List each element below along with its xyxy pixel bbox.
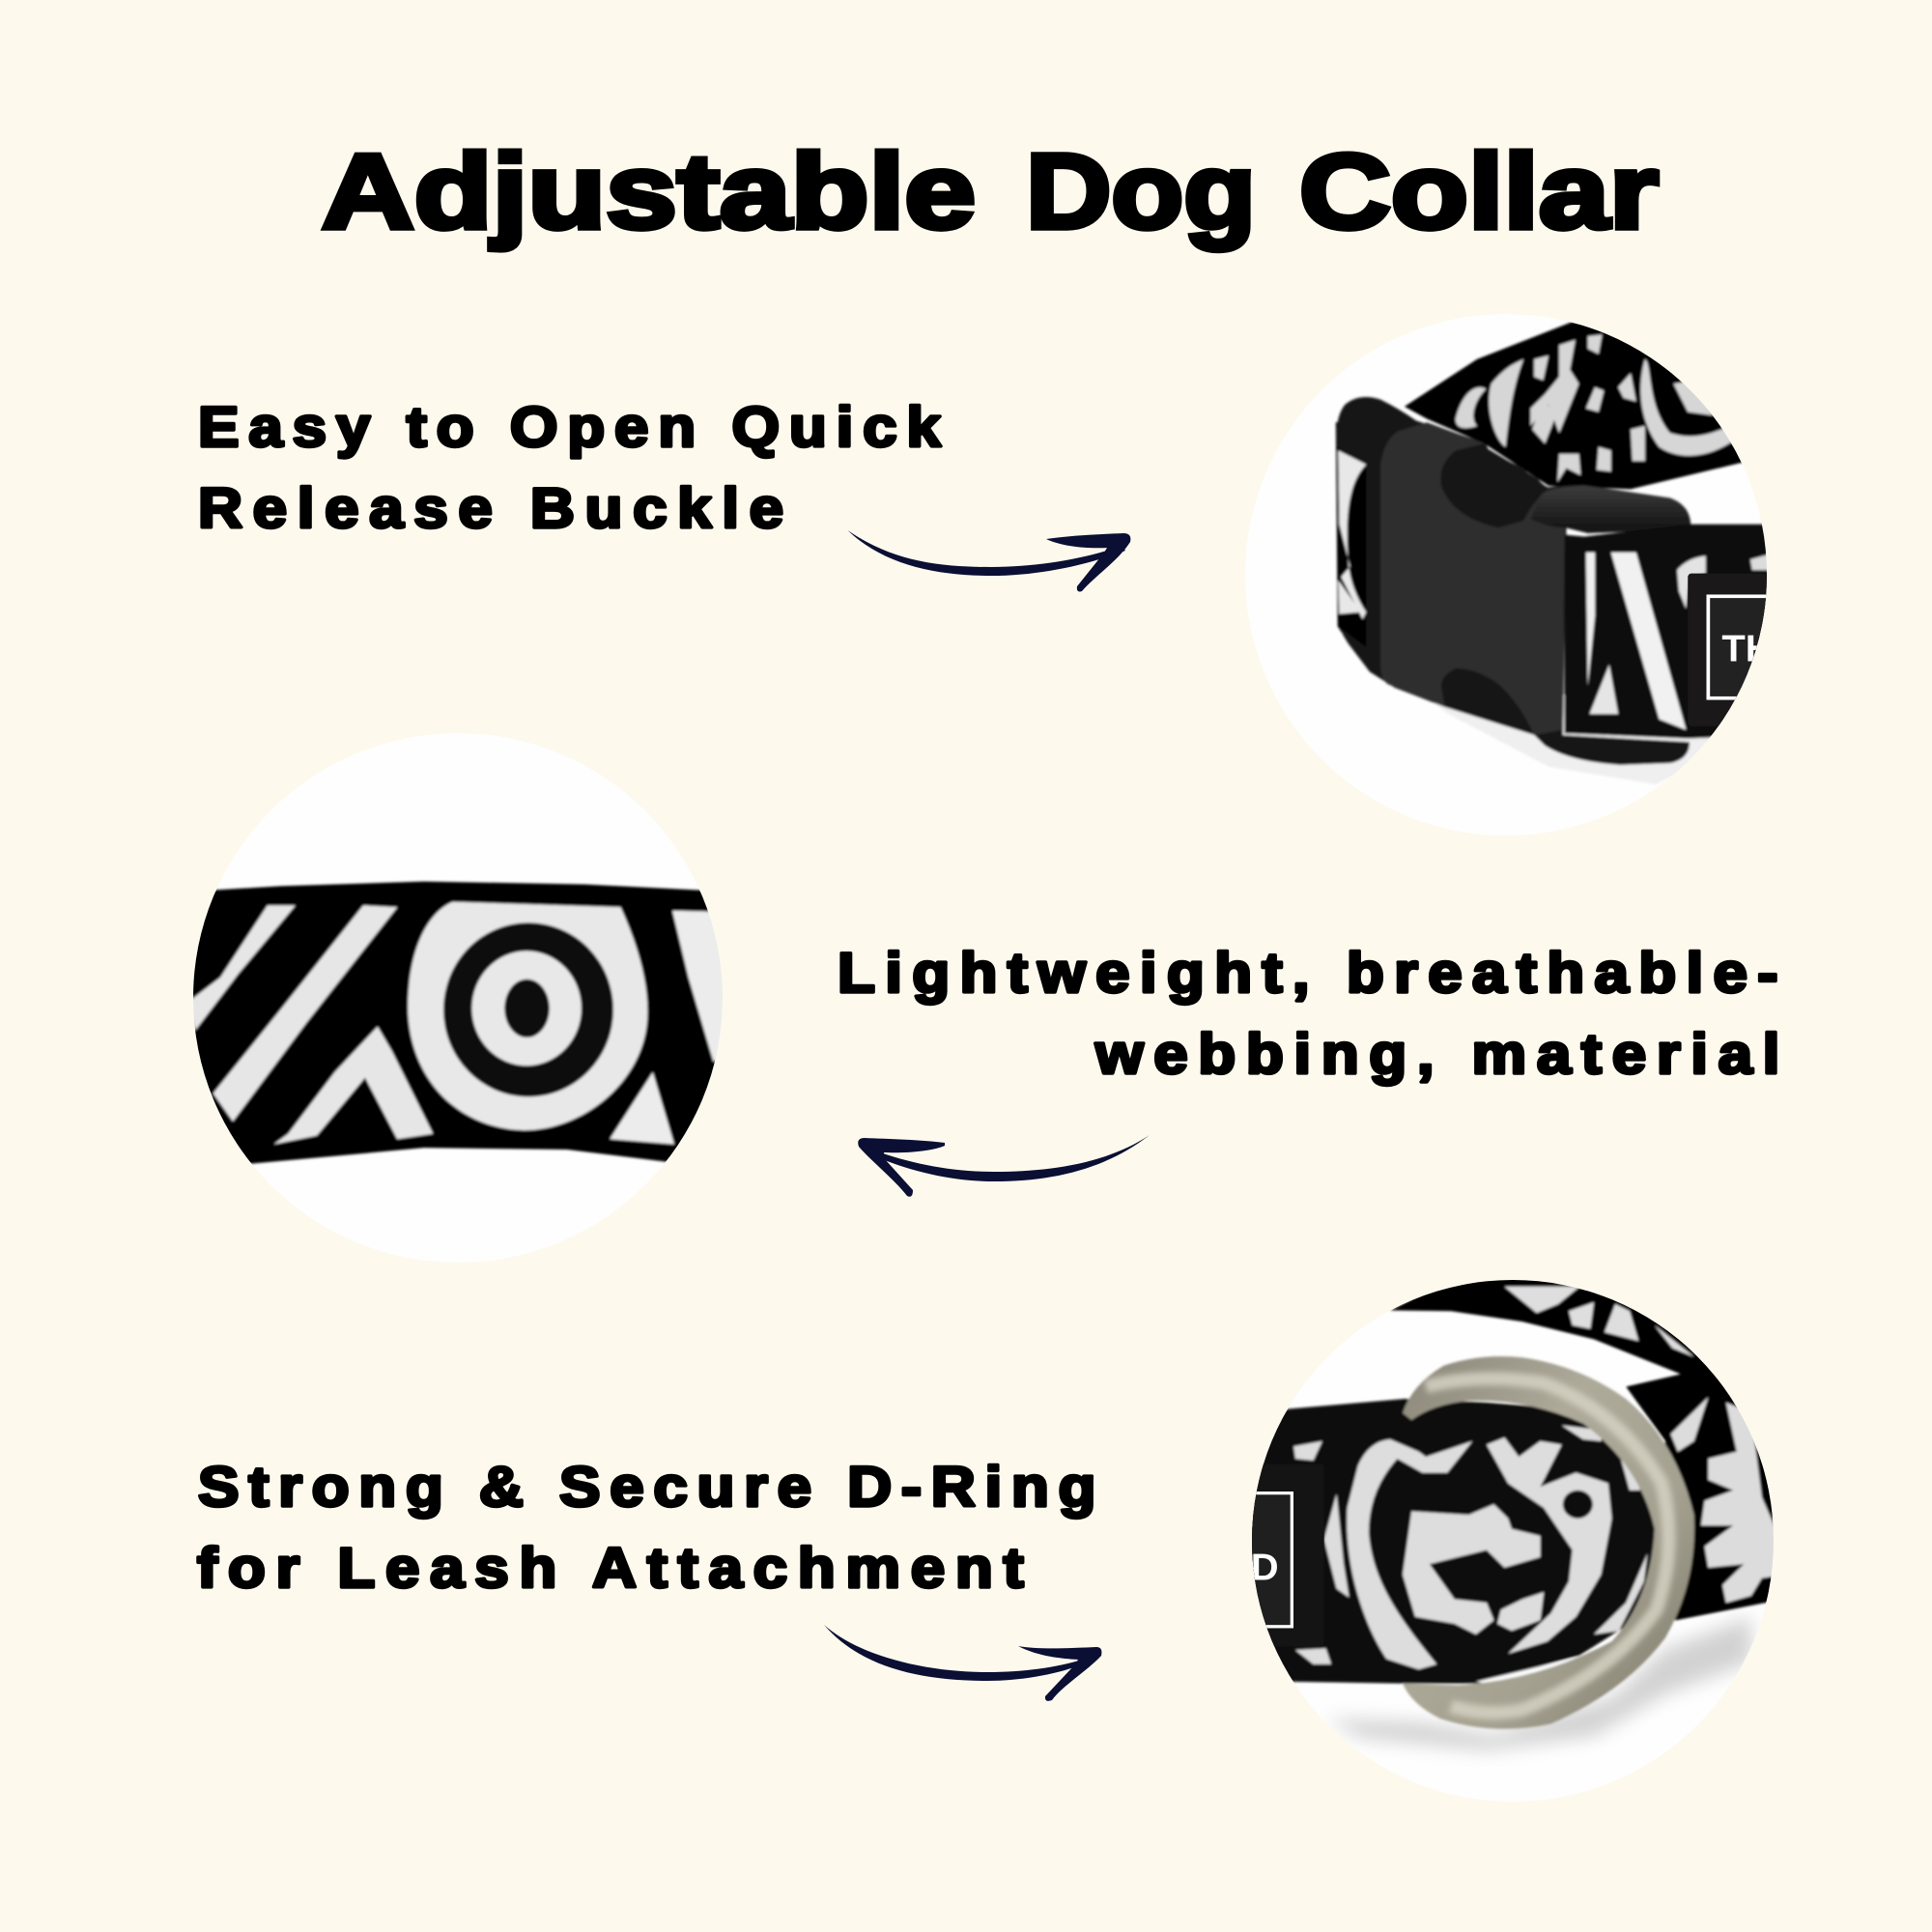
photo circle: webbing material — [174, 733, 753, 1263]
strap gap — [1476, 1656, 1587, 1684]
brand tag: D — [1251, 1547, 1279, 1588]
brand tag: TH — [1721, 628, 1774, 669]
buckle body — [1380, 422, 1565, 735]
feature text: D-ring: for Leash Attachment — [197, 1537, 1024, 1599]
title: Adjustable — [322, 132, 976, 251]
feature text: webbing material: webbing, material — [1094, 1023, 1779, 1085]
buckle and straps — [1336, 314, 1770, 784]
photo circle: D-ring — [1252, 1280, 1774, 1802]
buckle silhouette — [1337, 397, 1690, 765]
feature text: quick release buckle: Easy to Open Quick — [198, 396, 941, 458]
floor shadow — [1325, 1617, 1751, 1750]
D-ring — [1403, 1356, 1694, 1729]
brand tag — [1252, 1464, 1324, 1646]
main strap — [1236, 1399, 1659, 1684]
feature text: D-ring — [197, 1456, 1095, 1599]
feature text: D-ring: Strong & Secure D-Ring — [198, 1456, 1096, 1518]
arrow: D-ring text to D-ring photo — [824, 1625, 1101, 1701]
diagonal stripes — [188, 905, 433, 1145]
bottom notch — [1441, 673, 1530, 733]
arrow: buckle text to buckle photo — [848, 530, 1130, 591]
feature text: webbing material: Lightweight, breathable- — [838, 942, 1778, 1004]
front webbing strap — [1565, 525, 1770, 739]
back strap — [1390, 1265, 1737, 1375]
D-ring highlight — [1426, 1378, 1668, 1713]
back webbing strap — [1405, 314, 1763, 489]
title: Collar — [1299, 132, 1659, 251]
photo circle: quick release buckle — [1245, 314, 1787, 836]
feature text: quick release buckle: Release Buckle — [198, 477, 783, 539]
button notch — [1510, 462, 1528, 473]
infographic canvas — [193, 149, 1777, 1802]
feature text: quick release buckle — [198, 396, 941, 539]
buckle top lip — [1530, 486, 1690, 533]
right side stripes — [608, 908, 723, 1148]
title — [322, 132, 1659, 251]
brand tag — [1688, 574, 1767, 726]
arrow: webbing text to webbing photo — [858, 1135, 1150, 1197]
webbing band — [174, 882, 753, 1167]
strap and ring — [1252, 1280, 1774, 1731]
buckle shadow — [1341, 633, 1727, 784]
feature text: webbing material — [838, 942, 1779, 1085]
right strap section — [1626, 1357, 1808, 1620]
title: Dog — [1026, 132, 1256, 251]
left strap through buckle — [1336, 422, 1368, 665]
concentric target pattern — [408, 902, 647, 1130]
